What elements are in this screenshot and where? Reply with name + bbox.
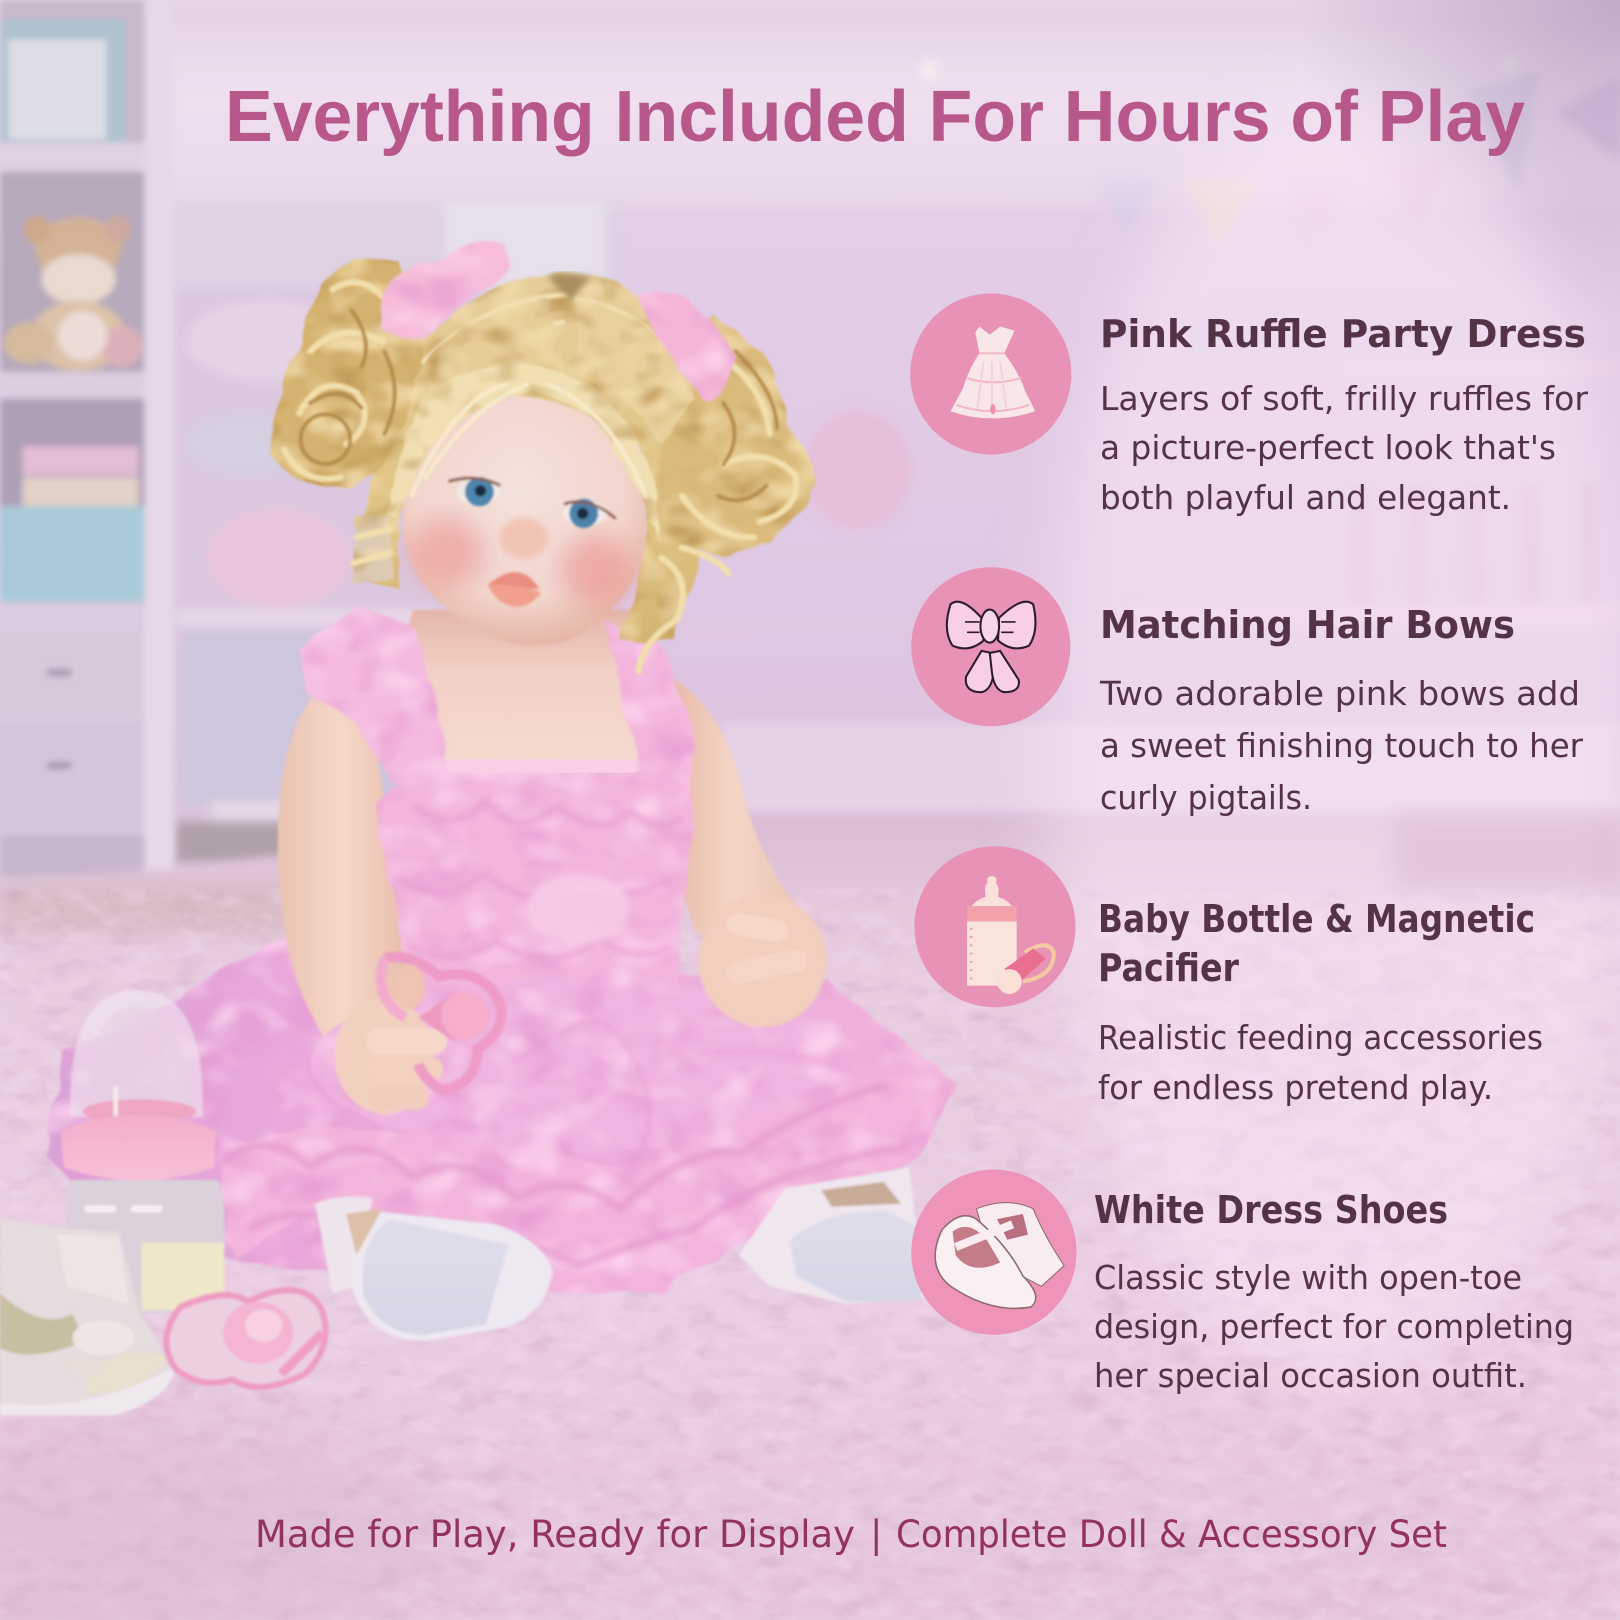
description: both playful and elegant. [1100,478,1511,517]
ruffle straps [302,604,694,827]
feature: Pink Ruffle Party Dress [1100,312,1598,517]
description: Two adorable pink bows add [1099,674,1580,713]
description: a sweet finishing touch to her [1100,726,1583,765]
description: Classic style with open-toe [1094,1258,1522,1297]
lower ruffled skirt [217,976,956,1291]
description: a picture-perfect look that's [1100,428,1556,467]
hair parting [548,274,591,300]
heading: Matching Hair Bows [1100,603,1515,647]
description: curly pigtails. [1100,778,1312,817]
icon: shoes [911,1170,1077,1335]
icon: bow [911,567,1070,726]
heading: Pacifier [1098,946,1239,990]
pink carpet [0,816,1620,1620]
icon: dress [910,293,1071,455]
hair cap [356,274,715,641]
fringe strands [411,384,646,496]
bottle [61,990,224,1313]
face [403,394,646,646]
description: for endless pretend play. [1098,1068,1493,1107]
heading: Pink Ruffle Party Dress [1100,312,1586,356]
back skirt [46,935,951,1291]
left arm [278,677,424,1064]
heading: Baby Bottle & Magnetic [1098,897,1535,941]
sandal on carpet [0,1219,176,1415]
ringlet strands [284,282,796,672]
heading: White Dress Shoes [1094,1188,1448,1232]
title: Everything Included For Hours of Play [225,77,1525,157]
footer tagline: Made for Play, Ready for Display [255,1513,855,1556]
icon: bottle and pacifier [914,846,1076,1007]
feature: Matching Hair Bows [1099,603,1594,817]
skirt ruffle folds [222,1022,909,1266]
feature icons [910,293,1077,1335]
bodice ruffle details [398,801,682,958]
left hand [335,998,447,1114]
white shelf with toys [0,0,174,883]
chest and neck [377,610,687,785]
fringe [387,300,694,542]
pigtail right [656,315,817,558]
soft panel glow behind features [1043,103,1620,1384]
eyes [448,477,616,528]
white shoe soles [315,1167,925,1341]
pacifier in hand [381,957,501,1090]
pigtail left [272,258,424,584]
cheeks [409,518,484,588]
description: Realistic feeding accessories [1098,1018,1543,1057]
nose [499,518,549,559]
feature: White Dress Shoes [1094,1188,1584,1395]
doll [0,239,956,1415]
bodice [374,759,692,1007]
footer tagline: | [870,1513,882,1556]
description: design, perfect for completing [1094,1307,1574,1346]
right hand [698,895,827,1027]
description: her special occasion outfit. [1094,1356,1527,1395]
hair bows [380,239,736,401]
footer tagline: Complete Doll & Accessory Set [896,1513,1447,1556]
right arm [656,672,796,935]
feature: Baby Bottle & Magnetic Pacifier [1098,897,1554,1107]
lips [488,572,541,607]
description: Layers of soft, frilly ruffles for [1100,379,1588,418]
pacifier on carpet [166,1290,325,1387]
